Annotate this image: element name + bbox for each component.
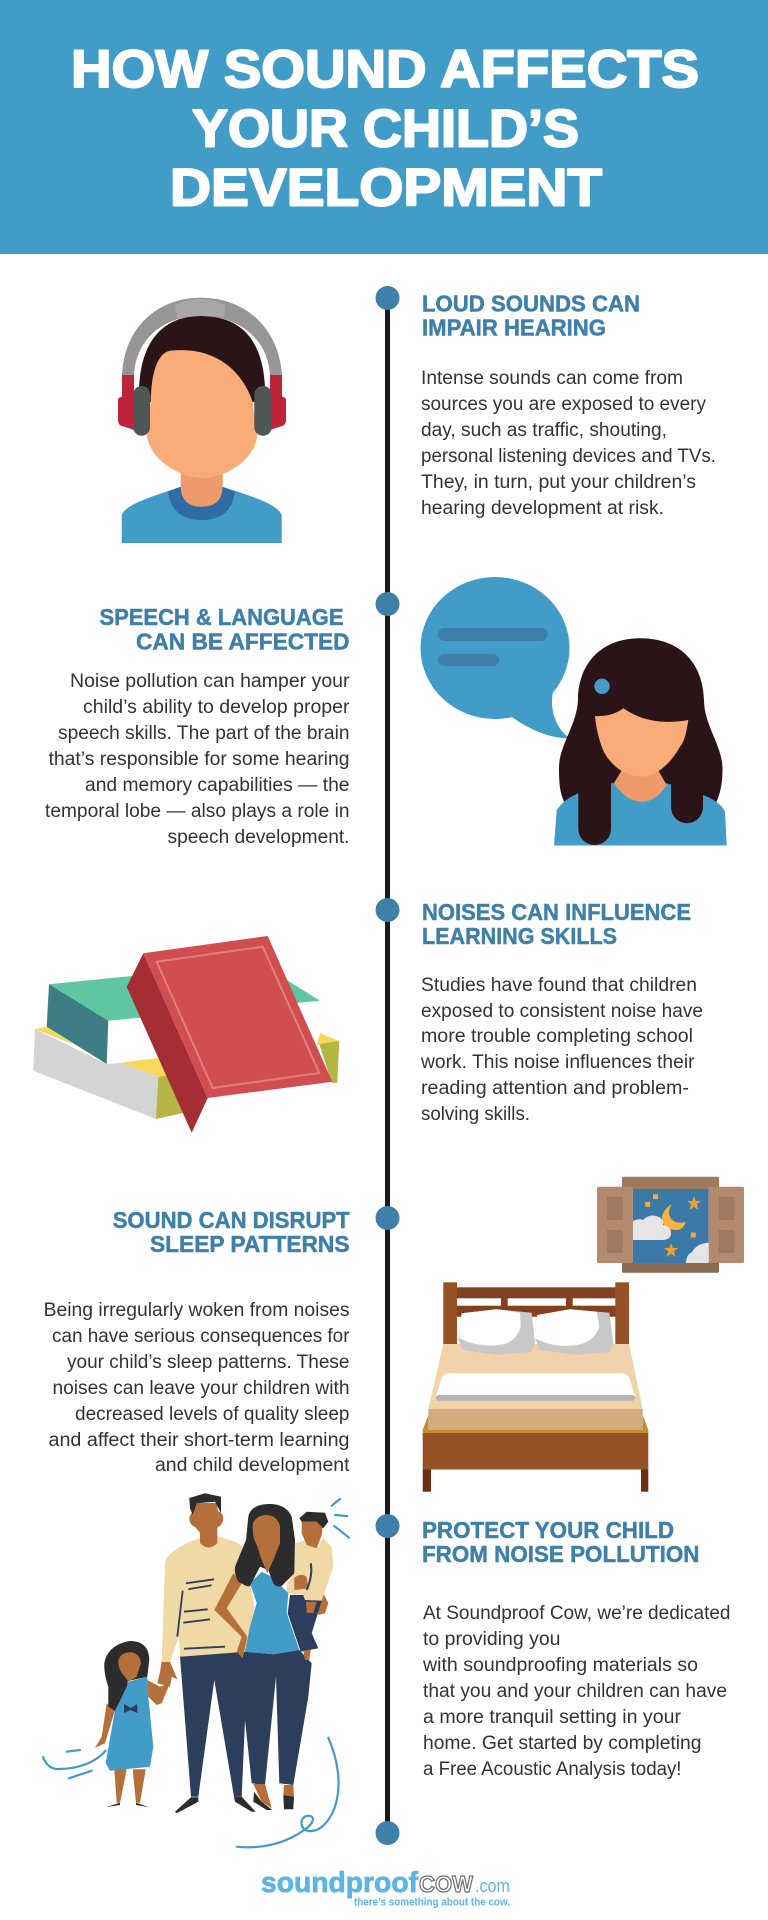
body: protect: that you and your children can have — [423, 1681, 727, 1702]
footer logo: there’s something about the cow. — [354, 1896, 510, 1908]
body: learning: exposed to consistent noise have — [421, 1001, 703, 1022]
icon: stack of books — [33, 936, 339, 1133]
body: sleep: decreased levels of quality sleep — [75, 1404, 350, 1425]
body: speech: speech skills. The part of the brain — [58, 723, 350, 744]
title — [71, 40, 699, 218]
body: protect: At Soundproof Cow, we’re dedicated — [423, 1603, 730, 1624]
body: learning: more trouble completing school — [421, 1026, 693, 1047]
heading: learning: LEARNING SKILLS — [422, 923, 617, 949]
body: loud sounds — [421, 368, 716, 519]
section 4 text — [44, 1207, 350, 1476]
heading: protect: FROM NOISE POLLUTION — [422, 1541, 700, 1567]
body: speech: Noise pollution can hamper your — [70, 671, 350, 692]
body: loud sounds: sources you are exposed to every — [421, 394, 706, 415]
body: sleep: noises can leave your children with — [52, 1378, 350, 1399]
girl — [95, 1641, 170, 1807]
title: HOW SOUND AFFECTS — [71, 40, 699, 99]
timeline — [376, 286, 400, 1845]
body: protect: to providing you — [423, 1629, 560, 1650]
heading: protect — [422, 1517, 700, 1567]
footer logo: .com — [475, 1876, 510, 1896]
woman and child — [214, 1504, 333, 1810]
body: sleep: Being irregularly woken from noises — [44, 1300, 349, 1321]
icon: bed — [423, 1282, 648, 1492]
body: loud sounds: day, such as traffic, shouting, — [421, 420, 667, 441]
body: protect: home. Get started by completing — [423, 1733, 702, 1754]
body: speech: speech development. — [168, 827, 350, 848]
heading: sleep: SLEEP PATTERNS — [150, 1231, 350, 1257]
motion swooshes — [43, 1499, 349, 1847]
body: sleep — [44, 1300, 350, 1476]
body: sleep: your child’s sleep patterns. These — [67, 1352, 350, 1373]
section 1 text — [421, 290, 716, 519]
heading: sleep — [113, 1207, 350, 1257]
heading: speech: CAN BE AFFECTED — [136, 628, 350, 654]
body: speech: that’s responsible for some hearing — [48, 749, 350, 770]
illustration: family — [43, 1493, 349, 1847]
heading: speech: SPEECH & LANGUAGE — [100, 604, 344, 630]
heading: learning: NOISES CAN INFLUENCE — [422, 899, 691, 925]
body: loud sounds: Intense sounds can come from — [421, 368, 683, 389]
body: loud sounds: They, in turn, put your children’s — [421, 472, 696, 493]
heading: speech — [100, 604, 350, 654]
footer logo: COW — [419, 1871, 473, 1897]
man — [157, 1493, 256, 1813]
body: speech: and memory capabilities — the — [85, 775, 350, 796]
body: speech — [45, 671, 350, 848]
title: DEVELOPMENT — [170, 158, 602, 218]
heading: loud sounds: LOUD SOUNDS CAN — [422, 290, 640, 316]
body: loud sounds: hearing development at risk. — [421, 498, 664, 519]
body: learning: reading attention and problem- — [421, 1078, 689, 1099]
body: protect: a more tranquil setting in your — [423, 1707, 682, 1728]
heading: learning — [422, 899, 691, 949]
icon: boy with headphones — [118, 298, 286, 543]
body: learning: work. This noise influences their — [420, 1052, 695, 1073]
heading: protect: PROTECT YOUR CHILD — [422, 1517, 674, 1543]
heading: loud sounds — [422, 290, 640, 340]
section 2 text — [45, 604, 350, 848]
icon: night window — [597, 1177, 744, 1273]
body: protect: a Free Acoustic Analysis today! — [423, 1759, 682, 1780]
title: YOUR CHILD’S — [192, 100, 579, 158]
body: sleep: and affect their short-term learning — [48, 1430, 350, 1451]
body: sleep: can have serious consequences for — [52, 1326, 350, 1347]
heading: sleep: SOUND CAN DISRUPT — [113, 1207, 350, 1233]
section 5 text — [422, 1517, 730, 1780]
body: learning — [420, 975, 703, 1125]
body: speech: temporal lobe — also plays a role in — [45, 801, 350, 822]
body: protect — [422, 1603, 730, 1780]
body: learning: Studies have found that children — [421, 975, 697, 996]
heading: loud sounds: IMPAIR HEARING — [422, 314, 606, 340]
body: protect: with soundproofing materials so — [422, 1655, 698, 1676]
section 3 text — [420, 899, 703, 1125]
footer logo: soundproof — [261, 1867, 418, 1899]
header panel — [0, 0, 768, 254]
body: sleep: and child development — [155, 1455, 350, 1476]
footer logo — [261, 1867, 510, 1908]
icon: girl with speech bubble — [420, 577, 727, 846]
body: loud sounds: personal listening devices and TVs. — [421, 446, 716, 467]
body: speech: child’s ability to develop proper — [83, 697, 350, 718]
body: learning: solving skills. — [421, 1104, 530, 1125]
